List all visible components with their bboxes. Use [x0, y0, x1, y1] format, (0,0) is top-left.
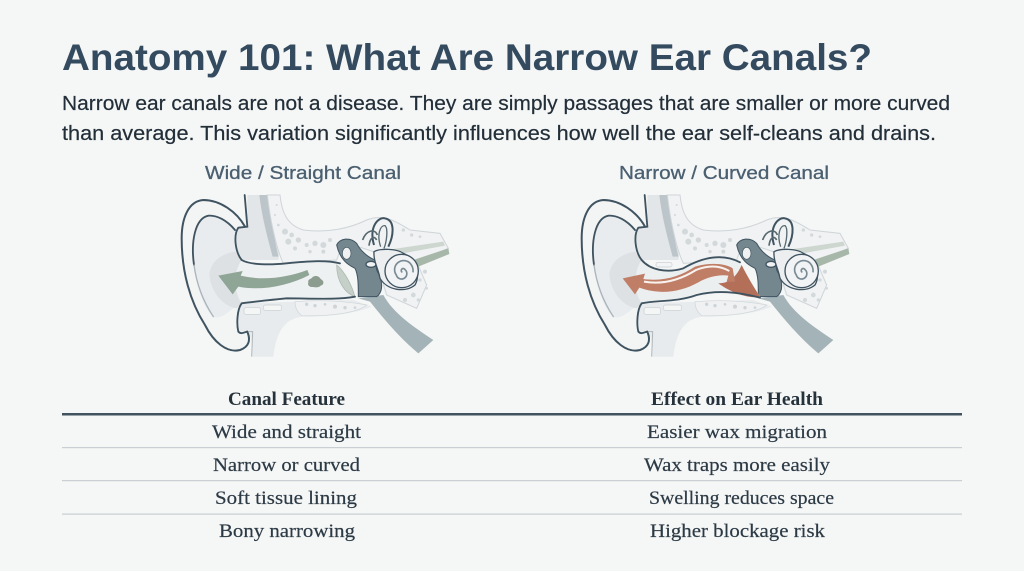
row: soft tissue lining: Swelling reduces space — [649, 488, 834, 509]
narrow canal passage — [635, 257, 760, 303]
diagram: narrow curved ear canal — [582, 195, 849, 357]
heading: narrow canal: Narrow / Curved Canal — [619, 163, 829, 183]
intro paragraph: than average. This variation significantly influences how well the ear self-cleans and drains. — [62, 122, 936, 145]
row: narrow or curved: Wax traps more easily — [644, 455, 831, 476]
row: wide and straight: Wide and straight — [212, 422, 362, 443]
heading: wide canal: Wide / Straight Canal — [205, 163, 401, 183]
arrow: wax moving out — [218, 270, 309, 294]
table header row — [228, 389, 823, 410]
row: wide and straight: Easier wax migration — [647, 422, 828, 443]
row: bony narrowing — [219, 521, 826, 542]
table header row: Canal Feature — [228, 389, 345, 410]
row: narrow or curved: Narrow or curved — [213, 455, 361, 476]
row: soft tissue lining — [215, 488, 834, 509]
wax clump — [308, 276, 323, 287]
row: bony narrowing: Bony narrowing — [219, 521, 356, 542]
eardrum — [337, 265, 355, 297]
arrow: trapped wax path — [623, 264, 735, 294]
table header row: Effect on Ear Health — [651, 389, 823, 410]
title: Anatomy 101: What Are Narrow Ear Canals? — [62, 37, 872, 78]
row: wide and straight — [212, 422, 828, 443]
wide canal passage — [235, 260, 355, 303]
wax blockage — [718, 265, 760, 297]
row: soft tissue lining: Soft tissue lining — [215, 488, 358, 509]
row: narrow or curved — [213, 455, 831, 476]
bony bump — [656, 262, 672, 267]
table — [62, 389, 962, 542]
row: bony narrowing: Higher blockage risk — [650, 521, 826, 542]
diagram: wide straight ear canal — [182, 195, 449, 357]
intro paragraph: Narrow ear canals are not a disease. They are simply passages that are smaller or more curved — [62, 92, 950, 115]
intro paragraph — [62, 92, 950, 145]
